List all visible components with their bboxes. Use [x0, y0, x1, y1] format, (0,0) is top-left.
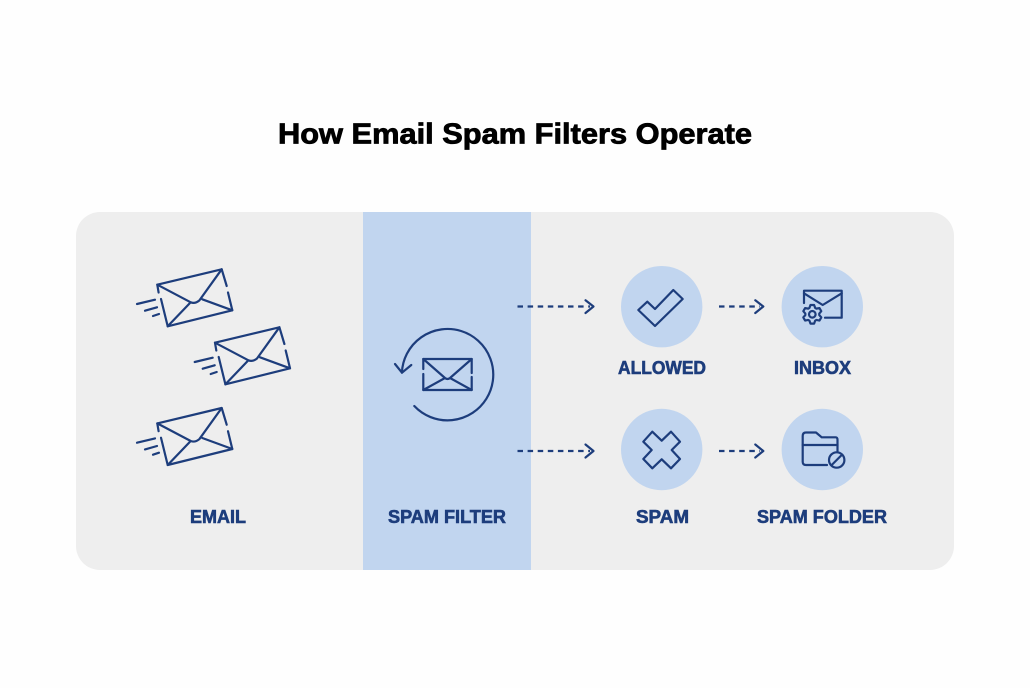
icon: flying email 1	[137, 269, 232, 326]
arrow: spam to spam folder	[719, 444, 763, 458]
label: inbox: INBOX	[794, 358, 851, 378]
icon: allowed check mark	[621, 266, 702, 347]
label: spam filter: SPAM FILTER	[388, 507, 506, 527]
arrow: filter to allowed	[518, 300, 594, 313]
icon: flying email 3	[137, 408, 232, 465]
title: How Email Spam Filters Operate	[278, 118, 752, 150]
panel: spam filter column	[363, 212, 531, 570]
panel: diagram background	[76, 212, 954, 570]
arrow: allowed to inbox	[719, 300, 763, 313]
arrow: filter to spam	[518, 444, 594, 458]
icon: spam filter cycle with envelope	[395, 329, 493, 420]
icon: spam cross	[621, 409, 702, 490]
label: email: EMAIL	[190, 507, 246, 527]
icon: flying email 2	[195, 327, 290, 384]
label: allowed: ALLOWED	[618, 358, 706, 378]
label: spam: SPAM	[636, 507, 689, 527]
icon: spam folder with block sign	[782, 409, 863, 490]
icon: inbox envelope with gear	[782, 266, 863, 347]
label: spam folder: SPAM FOLDER	[757, 507, 887, 527]
